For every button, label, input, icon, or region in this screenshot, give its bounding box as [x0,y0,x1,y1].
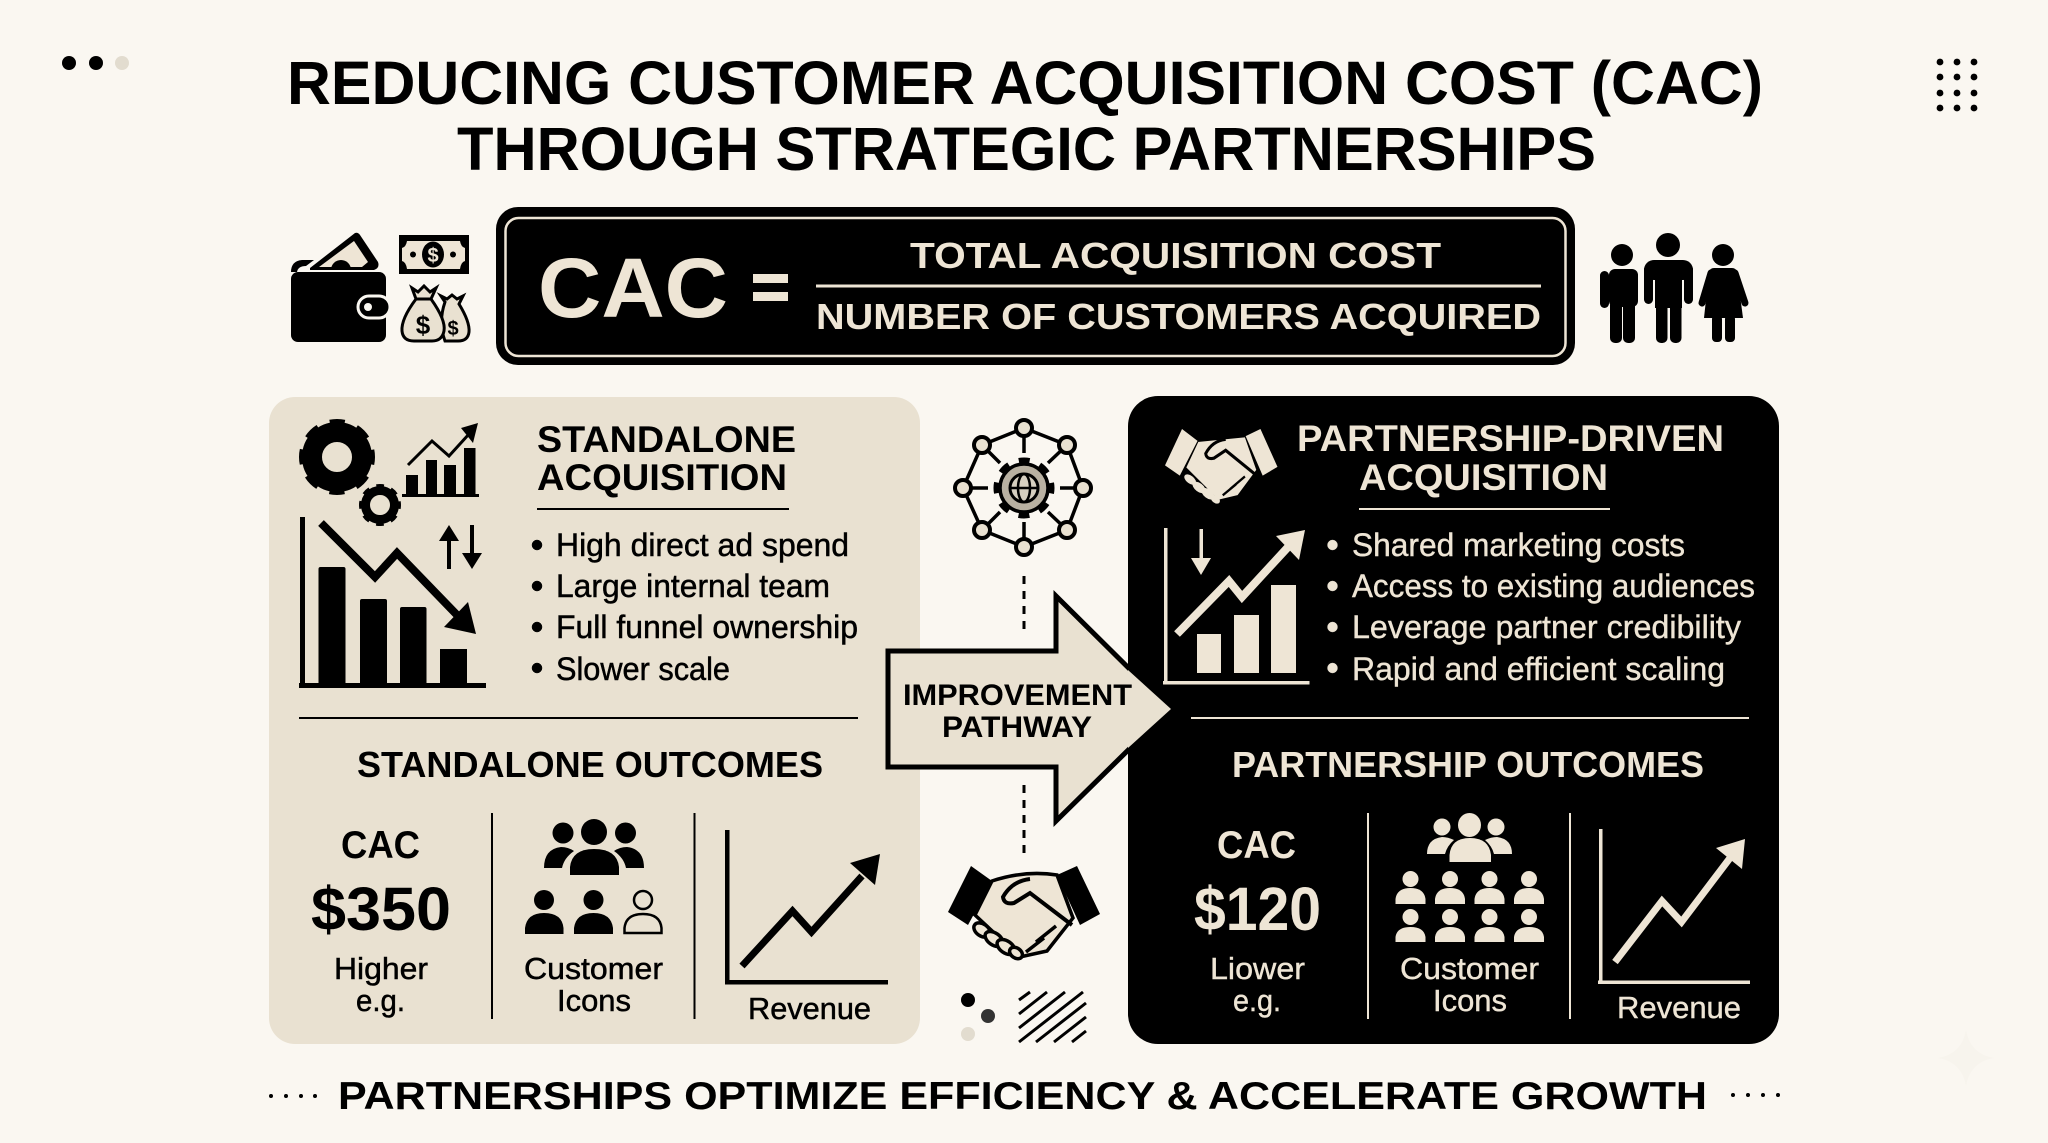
metric: CAC $350: Higher [334,951,428,986]
label: customer icons [524,951,663,1018]
metric: CAC $350: e.g. [356,983,405,1018]
heading: standalone acquisition: ACQUISITION [537,457,787,498]
formula: CAC equals: CAC [538,241,728,335]
list: partnership bullets: Shared marketing costs [1352,527,1685,563]
metric: CAC $120: CAC [1217,824,1296,867]
icon: handshake light [1165,429,1277,505]
list: standalone bullets: Large internal team [556,568,830,604]
metric: CAC $350 [311,824,451,1018]
list: partnership bullets: Leverage partner credibility [1352,609,1741,645]
icon: small growth chart [402,423,479,497]
formula: fraction: TOTAL ACQUISITION COST [910,235,1441,276]
decorative hatch lower centre [1019,992,1086,1042]
heading: partnership-driven acquisition: ACQUISITION [1359,457,1608,498]
icon: handshake dark [948,866,1100,961]
icon: money bags: $ [416,310,431,340]
connector: dashed line upper [1022,576,1026,634]
icon: money bags: $ [447,318,459,340]
decorative dots top left [62,56,129,70]
label: customer icons [1400,951,1539,1018]
metric: CAC $120: e.g. [1233,983,1281,1018]
decorative dot grid top right [1937,59,1977,111]
label: revenue: Revenue [1617,990,1741,1025]
decorative dots lower centre [961,993,995,1041]
icon: banknote: $ [427,245,439,267]
icon: up and down arrows [439,525,482,569]
list: standalone bullets: High direct ad spend [556,527,849,563]
list: standalone bullets: Slower scale [556,651,730,687]
metric: CAC $350: $350 [311,875,451,943]
icon: wallet with cash [291,233,390,342]
metric: CAC $120 [1194,824,1321,1018]
arrow: improvement pathway: PATHWAY [942,711,1092,744]
heading: standalone acquisition [537,419,796,510]
title: THROUGH STRATEGIC PARTNERSHIPS [457,115,1596,183]
icon: money bags [402,286,469,341]
faint sparkle watermark [1938,1030,1994,1086]
list: standalone bullets [532,527,858,687]
heading: standalone outcomes: STANDALONE OUTCOMES [357,744,823,785]
title [287,49,1763,183]
metric: CAC $350: CAC [341,824,420,867]
icon: small gear [362,486,398,524]
heading: partnership-driven acquisition [1297,418,1724,510]
chart: revenue growth [725,830,888,984]
icon: banknote [399,235,469,274]
heading: standalone acquisition: STANDALONE [537,419,796,460]
panel: standalone acquisition [269,397,920,1044]
heading: partnership-driven acquisition: PARTNERSHIP-DRIVEN [1297,418,1724,459]
icon: large gear [304,424,370,490]
arrow: improvement pathway: IMPROVEMENT [903,679,1132,712]
label: customer icons: Icons [557,983,631,1018]
takeaway banner: PARTNERSHIPS OPTIMIZE EFFICIENCY & ACCELERATE GROWTH [338,1075,1707,1118]
icon: large customer group [1396,813,1544,942]
chart: declining bars with arrow [299,517,486,688]
metric: CAC $120: Liower [1210,951,1305,986]
icon: customer group [525,819,662,934]
list: partnership bullets: Access to existing audiences [1352,568,1755,604]
chart: revenue growth [1598,829,1750,984]
list: standalone bullets: Full funnel ownership [556,609,858,645]
formula: fraction [816,235,1541,337]
label: customer icons: Customer [524,951,663,986]
heading: partnership outcomes: PARTNERSHIP OUTCOMES [1232,744,1704,785]
list: partnership bullets [1328,527,1755,687]
icon: network with central gear [955,420,1091,555]
list: partnership bullets: Rapid and efficient scaling [1352,651,1725,687]
formula: fraction: NUMBER OF CUSTOMERS ACQUIRED [816,296,1541,337]
label: customer icons: Icons [1433,983,1507,1018]
label: revenue: Revenue [748,991,871,1026]
arrow: improvement pathway [888,596,1171,821]
metric: CAC $120: $120 [1194,875,1321,943]
title: REDUCING CUSTOMER ACQUISITION COST (CAC) [287,49,1763,117]
chart: growing bars with arrow [1163,528,1310,684]
icon: three people [1600,233,1745,343]
connector: dashed line lower [1022,785,1026,855]
panel: partnership-driven acquisition [1128,396,1779,1044]
CAC formula box [496,207,1575,365]
label: customer icons: Customer [1400,951,1539,986]
